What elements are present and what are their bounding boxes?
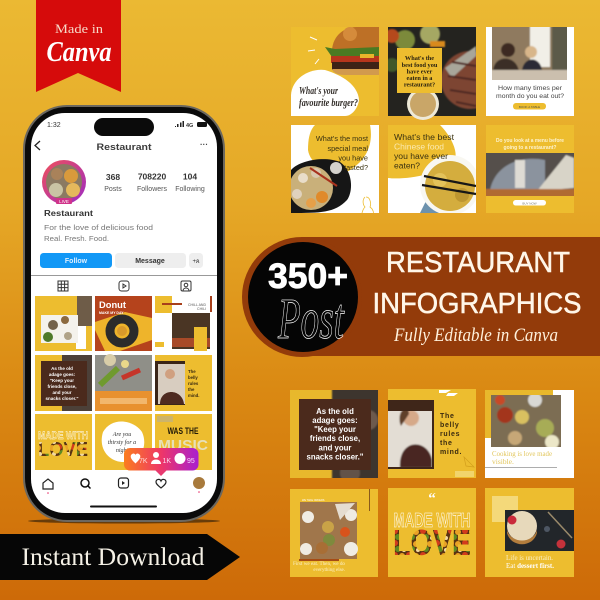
profile buttons: Message	[135, 258, 165, 265]
post: was the music: MUSIC	[158, 437, 208, 454]
post: donut: Donut	[99, 300, 127, 311]
profile avatar	[42, 160, 86, 204]
profile bio	[44, 209, 153, 243]
tile: cooking is love: Cooking is love made	[492, 449, 553, 458]
tile: most special meal: tasted?	[344, 163, 368, 172]
post: donut	[95, 296, 152, 351]
tile: best chinese food: What's the best	[394, 133, 455, 142]
ribbon: made in canva: Made in	[55, 21, 104, 36]
tile: most special meal: you have	[338, 154, 368, 162]
tile: cooking is love: visible.	[492, 457, 514, 466]
heading: infographics: INFOGRAPHICS	[372, 288, 582, 320]
post: made with love: LOVE	[38, 439, 88, 461]
profile avatar: LIVE	[59, 199, 69, 204]
post: chill and grill	[155, 296, 212, 351]
tile: most special meal: What's the most	[316, 134, 368, 143]
tile: how many times	[486, 25, 574, 116]
tile: belly rules: The	[440, 413, 455, 420]
post: made with love: MADE WITH	[38, 430, 88, 442]
post: vegetables	[95, 354, 152, 411]
tile: old adage: "Keep your	[314, 425, 356, 434]
tile: dessert first: Eat dessert first.	[506, 562, 554, 570]
tile: look at a menu: going to a restaurant?	[504, 145, 556, 151]
tile: best chinese food: Chinese food	[394, 142, 444, 152]
tile: best food in a restaurant: eaten in a	[407, 75, 433, 82]
post: was the music: WAS THE	[168, 426, 198, 437]
profile tab icons	[58, 281, 191, 291]
tile: dessert first	[485, 488, 574, 577]
phone mockup	[23, 105, 225, 524]
tile: best chinese food: you have ever	[394, 152, 448, 161]
tile: most special meal: special meal	[327, 144, 368, 153]
profile stats: 368	[106, 172, 120, 182]
post: belly rules the mind: belly	[188, 375, 198, 380]
tile: old adage: adage goes:	[312, 416, 358, 425]
status bar: 4G	[186, 123, 193, 129]
tile: look at a menu: Do you look at a menu before	[496, 138, 564, 144]
tile: how many times: month do you eat out?	[496, 93, 564, 100]
tile: how many times: How many times per	[498, 85, 563, 92]
badge: 350+ post: 350+	[268, 257, 348, 296]
heading: restaurant: RESTAURANT	[386, 247, 570, 279]
profile bio: Real. Fresh. Food.	[44, 236, 109, 243]
tile: made with love: MADE WITH	[394, 510, 470, 532]
profile post grid	[35, 296, 212, 470]
post: thirsty for a night	[95, 414, 152, 470]
tile: look at a menu	[484, 125, 576, 213]
notification bubble: 95	[187, 458, 195, 465]
tile: belly rules: belly	[440, 422, 459, 429]
profile buttons	[40, 253, 203, 268]
tile: best food in a restaurant	[388, 27, 476, 120]
notification bubble	[124, 448, 198, 476]
profile stats: Followers	[137, 186, 167, 193]
tile: belly rules: the	[440, 440, 453, 447]
tile: look at a menu: BUY NOW	[522, 201, 537, 205]
post: chill and grill: CHILI	[197, 307, 206, 311]
tile: belly rules: rules	[440, 431, 460, 438]
profile buttons: +ጸ	[192, 259, 200, 265]
profile stats	[104, 172, 205, 193]
notification bubble: 1K	[162, 458, 171, 465]
banner	[242, 237, 600, 357]
post: was the music	[155, 414, 212, 470]
subheading: fully editable: Fully Editable in Canva	[393, 325, 558, 346]
top template panel	[289, 24, 576, 215]
status bar: 1:32	[47, 122, 61, 129]
profile buttons: Follow	[65, 258, 88, 265]
tile: old adage: snacks closer."	[306, 452, 364, 462]
post: belly rules the mind: rules	[188, 381, 199, 386]
post: belly rules the mind	[155, 355, 212, 411]
profile stats: 104	[183, 172, 197, 182]
post: donut: MAKE MY DAY	[99, 311, 124, 315]
icon: burger	[325, 27, 379, 75]
post: belly rules the mind: the	[188, 387, 195, 392]
bottom navigation icons	[43, 477, 205, 494]
post: old adage	[35, 355, 92, 411]
tile: made with love: LOVE	[393, 522, 471, 563]
post: belly rules the mind: The	[188, 369, 196, 374]
home indicator	[90, 506, 157, 508]
post: thirsty for a night: thirsty for a	[108, 439, 136, 446]
badge: 350+ post	[248, 242, 358, 352]
post: old adage: adage goes:	[49, 372, 76, 377]
tile: made with love	[388, 488, 476, 577]
tile: how many times: BOOK A TABLE	[519, 105, 540, 109]
ribbon: made in canva	[36, 0, 121, 92]
post: thirsty for a night: night	[116, 448, 128, 454]
tile: old adage: friends close,	[310, 434, 360, 443]
tile: best food in a restaurant: What's the	[405, 55, 434, 62]
post: belly rules the mind: mind.	[188, 393, 199, 398]
post: old adage: friends close,	[47, 384, 77, 389]
profile stats: Posts	[104, 186, 122, 193]
profile header: ···	[200, 140, 208, 149]
tile: best food in a restaurant: have ever	[407, 68, 433, 76]
profile stats: 708220	[138, 172, 166, 182]
tile: table spread: WE TAKE ORDERS	[302, 499, 325, 502]
ribbon: made in canva: Canva	[46, 36, 112, 68]
tile: table spread	[290, 489, 378, 577]
profile header: Restaurant	[96, 142, 152, 153]
post: thirsty for a night: Are you	[112, 432, 131, 438]
instant download arrow: Instant Download	[22, 544, 205, 571]
profile bio: Restaurant	[44, 209, 93, 218]
post: old adage: snacks closer."	[46, 396, 78, 401]
tile: table spread: everything else.	[313, 568, 345, 573]
profile stats: Following	[175, 186, 205, 193]
tile: belly rules: mind.	[440, 449, 462, 456]
tile: best food in a restaurant: best food you	[402, 62, 438, 69]
tile: best chinese food	[388, 125, 480, 215]
post: chill and grill: CHILL AND	[188, 303, 206, 307]
tile: best chinese food: eaten?	[394, 162, 421, 170]
tile: favourite burger: favourite burger?	[299, 97, 358, 109]
badge: 350+ post: Post	[277, 286, 345, 351]
tile: favourite burger: What's your	[299, 85, 339, 97]
status bar	[47, 118, 207, 136]
post: old adage: and your	[52, 390, 72, 395]
profile header	[35, 140, 208, 153]
tile: made with love: “	[428, 491, 436, 507]
post: old adage: As the old	[51, 366, 73, 371]
bottom template panel	[290, 388, 574, 577]
instant download arrow	[0, 534, 240, 580]
tile: old adage	[290, 388, 380, 483]
post: food flatlay	[35, 296, 92, 351]
tile: table spread: First we eat. Then, we do	[293, 562, 346, 567]
tile: favourite burger	[291, 27, 379, 116]
tile: old adage: As the old	[316, 407, 354, 416]
post: old adage: "Keep your	[50, 378, 74, 383]
tile: dessert first: Life is uncertain.	[506, 554, 553, 562]
tile: cooking is love	[485, 390, 574, 478]
notification bubble: 7K	[139, 458, 148, 465]
tile: most special meal	[289, 125, 379, 213]
profile bio: For the love of delicious food	[44, 225, 153, 232]
tile: old adage: and your	[319, 444, 351, 452]
post: made with love	[35, 414, 92, 470]
tile: best food in a restaurant: restaurant?	[404, 82, 435, 88]
tile: belly rules	[386, 389, 476, 478]
